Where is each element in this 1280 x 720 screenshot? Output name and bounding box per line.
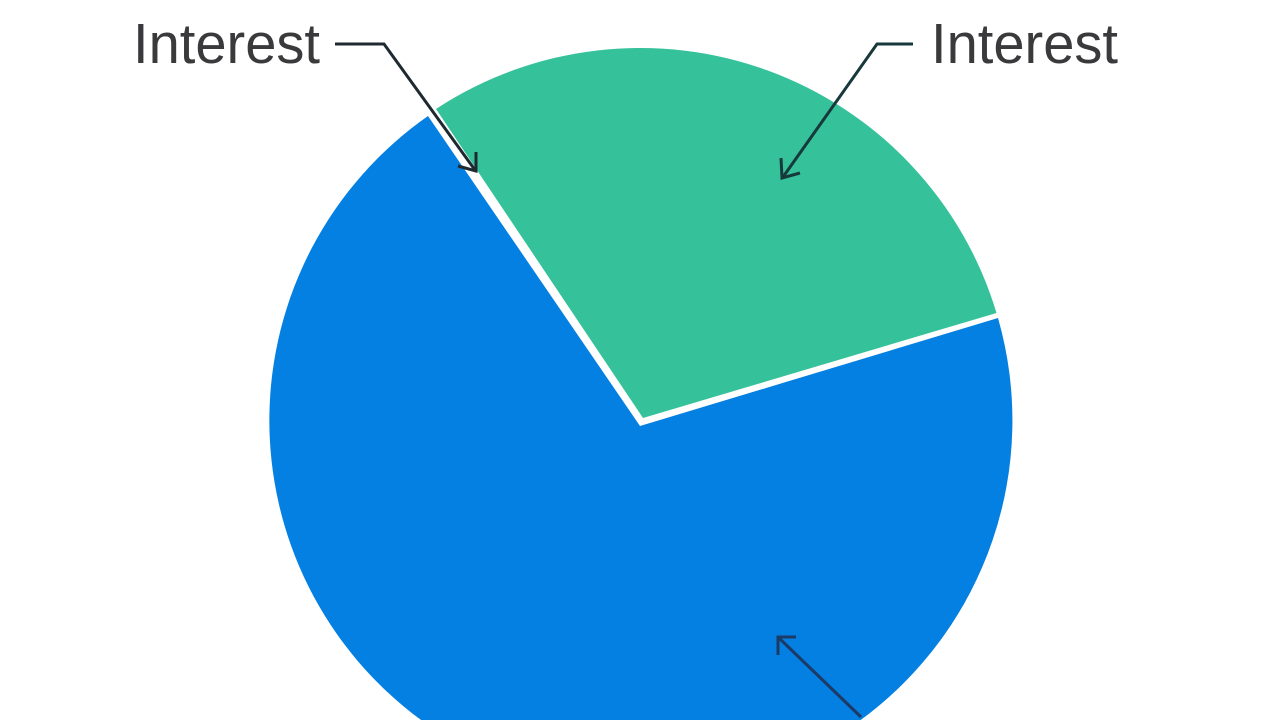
pie slice: green interest	[436, 48, 996, 418]
label: left Interest: Interest	[133, 12, 320, 76]
label: right Interest: Interest	[931, 12, 1118, 76]
arrow: left callout	[335, 44, 476, 171]
arrow: bottom callout	[778, 637, 861, 717]
pie slice: blue majority	[269, 116, 1012, 720]
arrow: right callout	[781, 44, 913, 178]
